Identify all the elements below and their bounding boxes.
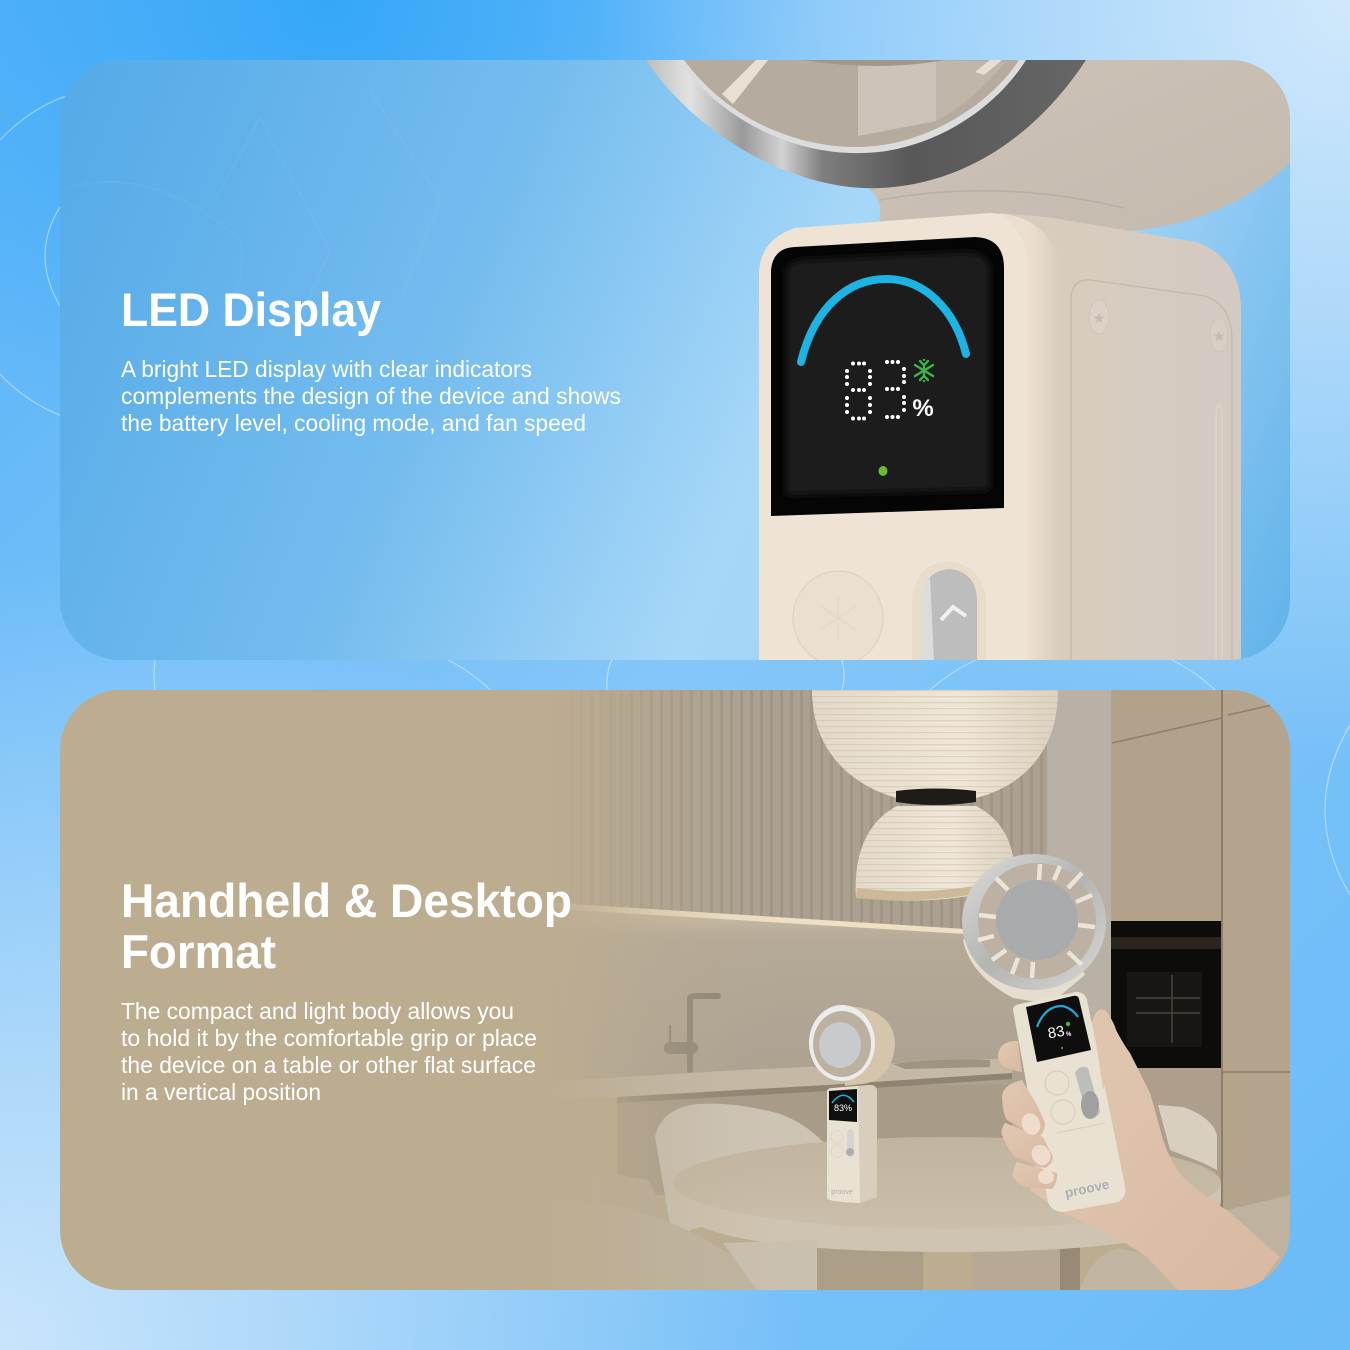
- lamp collar: [896, 788, 976, 805]
- screw right: ★: [1213, 328, 1225, 344]
- icon: snowflake: [915, 360, 933, 381]
- hand fingers: [998, 1010, 1116, 1189]
- hand palm: [1030, 1010, 1280, 1292]
- text: handheld description: to hold it by the comfortable grip or place: [121, 1025, 537, 1051]
- device front: [759, 213, 1028, 660]
- table: [673, 1137, 1221, 1290]
- product: fan close-up: [646, 60, 1290, 665]
- screw left: [1089, 300, 1109, 334]
- large slider: [1075, 1067, 1100, 1119]
- faucet: [670, 996, 718, 1070]
- large handheld fan: [962, 854, 1125, 1212]
- back chair right: [1158, 1105, 1217, 1170]
- panel: LED display: [60, 60, 1290, 665]
- heading: handheld and desktop format: Handheld & Desktop: [121, 874, 572, 927]
- text: handheld description: in a vertical position: [121, 1079, 321, 1105]
- heading: handheld and desktop format: [121, 874, 572, 978]
- vents: [978, 864, 1095, 978]
- small desktop fan: [809, 1005, 895, 1203]
- large screen: 83: [1047, 1023, 1066, 1042]
- logo: proove: [1063, 1176, 1111, 1201]
- mode slider: [912, 562, 986, 660]
- small fan ring: [809, 1005, 875, 1081]
- text: LED description: [121, 356, 621, 436]
- battery arc: [801, 279, 966, 362]
- backsplash: [581, 911, 1032, 1088]
- text: LED description: A bright LED display with clear indicators: [121, 356, 532, 382]
- text: handheld description: The compact and light body allows you: [121, 998, 514, 1024]
- panel: handheld and desktop format: [60, 690, 1290, 1292]
- side chair behind: [628, 1177, 656, 1195]
- nails: [1018, 1110, 1054, 1184]
- device front edge: [1000, 214, 1060, 660]
- large buttons: [1045, 1071, 1075, 1124]
- faint leaf pattern: [60, 90, 440, 340]
- slatted wall: [602, 690, 1047, 929]
- large fan housing: [963, 880, 1085, 1004]
- small buttons: [831, 1131, 843, 1157]
- photo: kitchen scene: [540, 690, 1290, 1292]
- light strip: [590, 906, 964, 934]
- large screen: [1026, 996, 1091, 1062]
- fan head housing: [870, 60, 1290, 245]
- text: LED description: complements the design of the device and shows: [121, 383, 621, 409]
- side access panel: [1071, 280, 1232, 660]
- oven: [1111, 921, 1221, 1068]
- device side: [1000, 213, 1241, 660]
- power button: [793, 571, 883, 665]
- large handle: [1013, 992, 1125, 1212]
- foreground chairs: [660, 1195, 1290, 1290]
- heading: handheld and desktop format: Format: [121, 925, 276, 978]
- large screen: %: [1066, 1032, 1072, 1038]
- screw right: [1210, 318, 1228, 352]
- percent sign: %: [912, 395, 934, 422]
- head crease: [880, 191, 1124, 208]
- small fan side shade: [858, 1085, 877, 1203]
- text: handheld description: the device on a table or other flat surface: [121, 1052, 536, 1078]
- screw left: ★: [1093, 310, 1105, 326]
- display screen: [771, 237, 1004, 516]
- lower lamp: [856, 806, 1015, 901]
- cabinets: [1111, 690, 1290, 1290]
- fan ring: [646, 60, 1086, 188]
- small fan slider: [846, 1129, 854, 1157]
- center disc: [996, 880, 1078, 960]
- small logo: proove: [831, 1189, 853, 1196]
- text: handheld description: [121, 998, 537, 1105]
- large fan ring: [962, 854, 1106, 990]
- seam: [1057, 1123, 1105, 1133]
- heading: LED Display: LED Display: [121, 283, 381, 336]
- small fan housing: [845, 1006, 895, 1086]
- upper lantern: [812, 690, 1058, 798]
- counter and lower cabinets: [607, 1058, 1012, 1195]
- small screen: [829, 1089, 857, 1122]
- small fan handle: [827, 1085, 877, 1203]
- digit 8: [845, 362, 872, 420]
- digit 3: [885, 360, 906, 419]
- back chair left: [655, 1104, 823, 1232]
- column: [1047, 690, 1111, 1022]
- text: LED description: the battery level, cooling mode, and fan speed: [121, 410, 586, 436]
- small screen: 83%: [834, 1103, 852, 1113]
- status dot: [878, 466, 888, 476]
- fade to text panel: [540, 690, 780, 1290]
